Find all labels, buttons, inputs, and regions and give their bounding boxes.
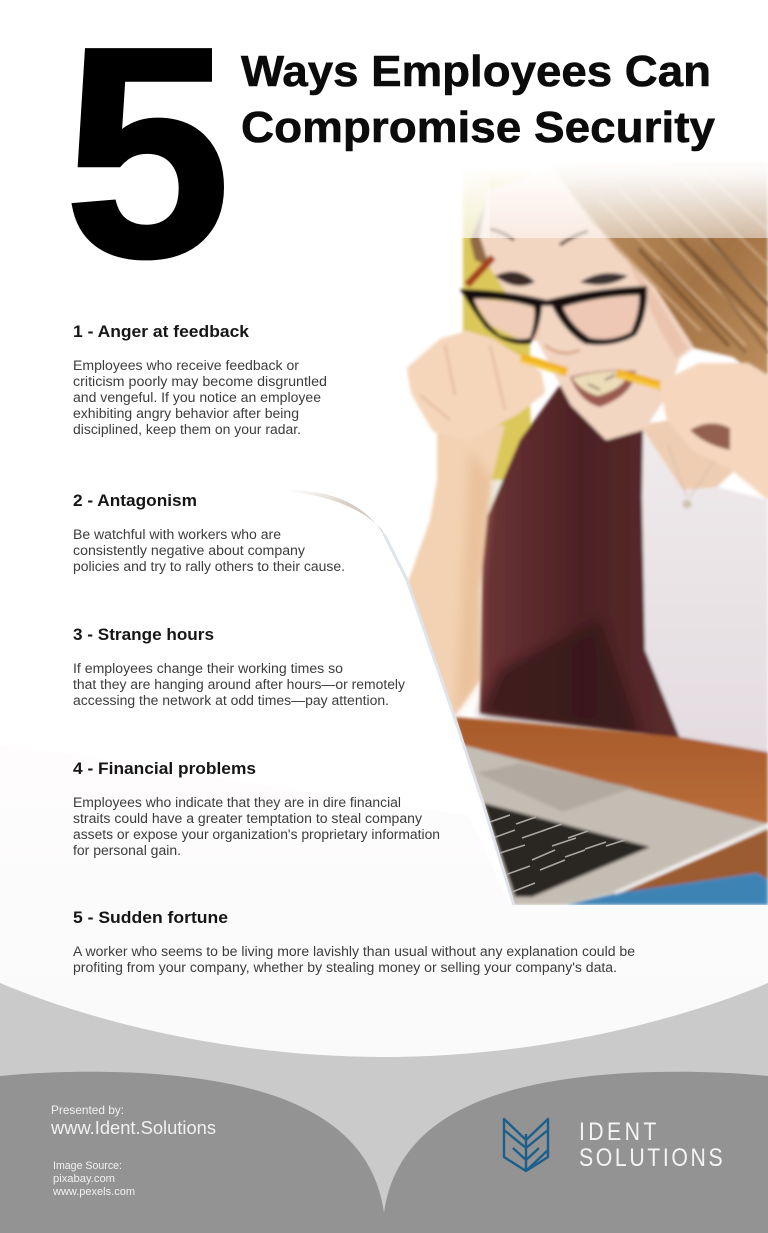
neck [640, 420, 735, 490]
keyboard [483, 803, 650, 897]
body 4: assets or expose your organization's proprietary information [73, 827, 440, 842]
laptop deck [463, 745, 768, 905]
body 3 [73, 661, 405, 708]
item 4: financial problems [73, 759, 440, 858]
nose shade [545, 345, 580, 353]
heading 3: 3 - Strange hours [73, 625, 214, 644]
body 2 [73, 527, 345, 574]
dark footer panels [0, 1072, 768, 1233]
body 1: and vengeful. If you notice an employee [73, 390, 321, 405]
lilac edge [384, 534, 514, 906]
white shirt [640, 425, 768, 752]
temple of glasses [467, 257, 493, 285]
body 1: criticism poorly may become disgruntled [73, 374, 327, 389]
body 4 [73, 795, 440, 858]
body 3: accessing the network at odd times—pay attention. [73, 693, 389, 708]
pale backdrop beside arm [482, 480, 530, 590]
extra fade over the yellow wall [455, 150, 490, 238]
body 5: A worker who seems to be living more lavishly than usual without any explanation could be [73, 944, 635, 959]
body 4: straits could have a greater temptation to steal company [73, 811, 422, 826]
yellow wall [463, 170, 533, 483]
presented by: www.Ident.Solutions [50, 1118, 216, 1138]
item 2: antagonism [73, 491, 345, 574]
heading 1: 1 - Anger at feedback [73, 322, 250, 341]
item 5: sudden fortune [73, 908, 635, 975]
image source: www.pexels.com [52, 1186, 135, 1198]
blue notebook [565, 873, 768, 905]
forearm shade [455, 450, 492, 716]
body 2: consistently negative about company [73, 543, 305, 558]
trackpad [477, 763, 633, 812]
lens tint [472, 298, 540, 342]
body 3: that they are hanging around after hours—or remotely [73, 677, 405, 692]
hair [550, 160, 768, 385]
top fade [440, 150, 768, 238]
body 2: Be watchful with workers who are [73, 527, 281, 542]
body 1: exhibiting angry behavior after being [73, 406, 299, 421]
arm [405, 425, 505, 716]
heading 2: 2 - Antagonism [73, 491, 197, 510]
logo wordmark [579, 1117, 723, 1171]
palm shadow [690, 423, 730, 450]
teeth [572, 371, 628, 396]
pencil [521, 358, 662, 386]
body 1: disciplined, keep them on your radar. [73, 422, 301, 437]
logo wordmark: IDENT [579, 1117, 656, 1145]
off-white lower background [0, 746, 768, 1080]
heading 5: 5 - Sudden fortune [73, 908, 228, 927]
maroon dark shade [480, 620, 640, 735]
heading 4: 4 - Financial problems [73, 759, 256, 778]
table [455, 717, 768, 826]
body 4: for personal gain. [73, 843, 181, 858]
photo: woman biting pencil at laptop [405, 140, 768, 905]
face [483, 173, 690, 437]
title: Ways Employees Can [241, 47, 711, 96]
eyebrows [490, 229, 514, 240]
title: Compromise Security [241, 103, 716, 152]
title [241, 47, 716, 152]
laptop front edge highlight [615, 825, 768, 893]
eyes [495, 272, 535, 286]
image source: Image Source: [53, 1160, 122, 1172]
body 4: Employees who indicate that they are in dire financial [73, 795, 401, 810]
white cover above the photo [440, 140, 768, 162]
left fist [412, 336, 540, 436]
body 1 [73, 358, 327, 437]
presented by [50, 1103, 216, 1138]
grey footer swoosh [0, 983, 768, 1233]
image source [52, 1160, 135, 1198]
body 3: If employees change their working times so [73, 661, 343, 676]
laptop screen edge [0, 490, 514, 907]
logo wordmark: SOLUTIONS [579, 1143, 723, 1171]
white screen mask [0, 491, 513, 907]
necklace [668, 445, 715, 497]
wood below laptop [620, 829, 768, 893]
right hand [664, 367, 768, 495]
glasses [460, 286, 647, 345]
item 1: anger at feedback [73, 322, 327, 437]
image source: pixabay.com [53, 1173, 115, 1185]
item 3: strange hours [73, 625, 405, 708]
curved screen corner [285, 490, 392, 550]
body 1: Employees who receive feedback or [73, 358, 300, 373]
keyboard keys [490, 815, 625, 892]
maroon top [480, 385, 680, 738]
mouth [570, 370, 636, 407]
body 5 [73, 944, 635, 975]
icon: Ident Solutions shield logo [504, 1119, 548, 1171]
body 2: policies and try to rally others to their cause. [73, 559, 345, 574]
body 5: profiting from your company, whether by stealing money or selling your company's data. [73, 960, 617, 975]
presented by: Presented by: [51, 1103, 124, 1117]
hair strands [585, 168, 768, 352]
